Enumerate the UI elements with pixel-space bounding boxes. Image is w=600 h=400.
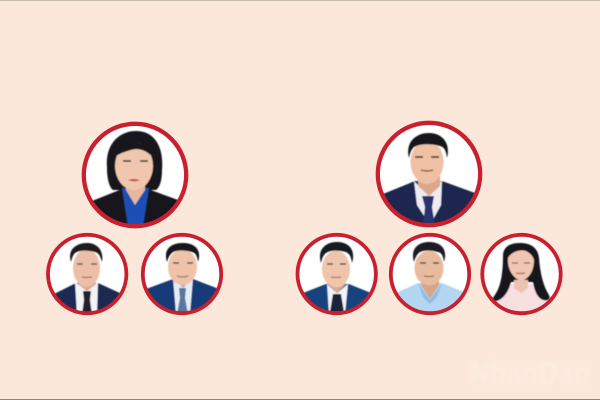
portrait: lower right person 2 (390, 235, 472, 320)
portrait: top left leader (84, 124, 186, 240)
portrait: lower right person 3 (482, 235, 561, 320)
portrait: lower right person 1 (298, 235, 376, 320)
portrait: top right leader (376, 123, 484, 240)
portrait: lower left person 1 (48, 235, 126, 320)
portrait: lower left person 2 (140, 235, 224, 320)
